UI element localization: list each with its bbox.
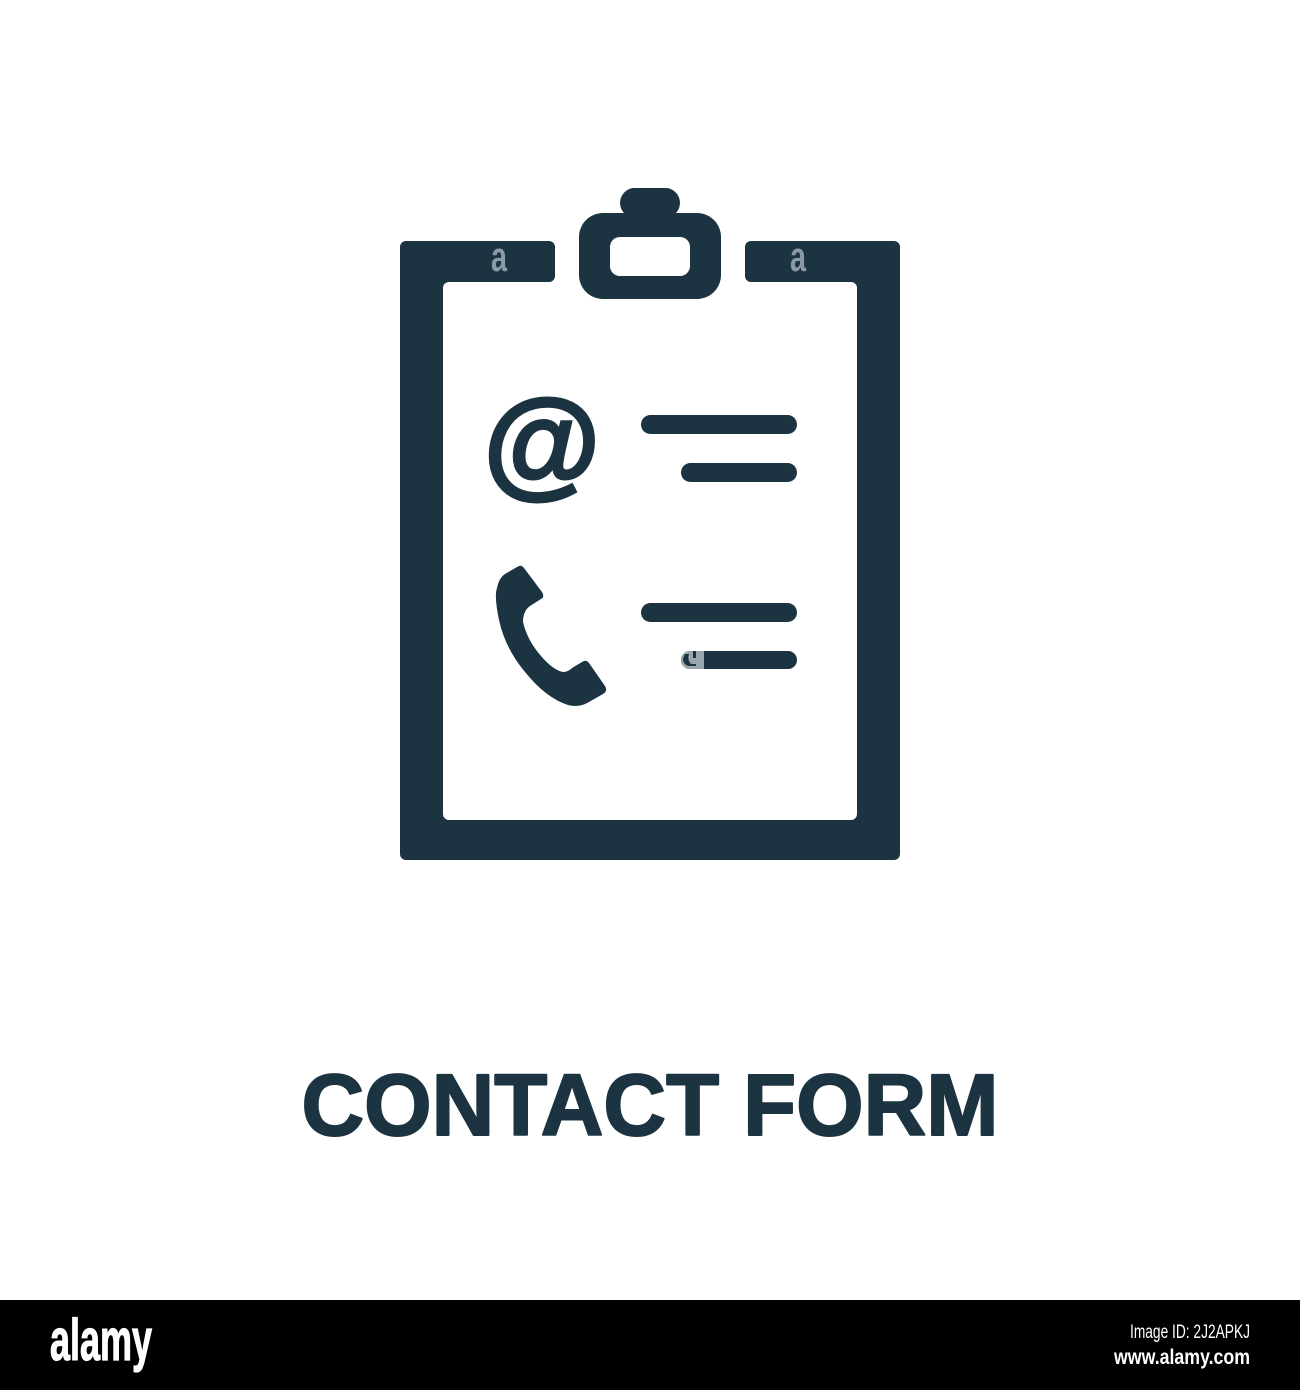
- image id: Image ID: 2J2APKJ: [1130, 1322, 1250, 1343]
- website: www.alamy.com: [1113, 1346, 1250, 1369]
- clipboard board: [400, 241, 900, 860]
- phone line short: [681, 651, 797, 669]
- clipboard clip: [579, 188, 721, 299]
- icon: at sign: @: [481, 377, 599, 511]
- title: CONTACT FORM: [302, 1057, 998, 1154]
- email line long: [641, 415, 797, 434]
- footer bar: [0, 1300, 1300, 1390]
- phone line long: [641, 603, 797, 622]
- watermark letter right: a: [790, 233, 806, 280]
- watermark letter left: a: [491, 233, 507, 280]
- icon: telephone handset: [496, 566, 606, 706]
- footer logo: alamy: [50, 1308, 152, 1373]
- watermark fragment on line: [681, 651, 704, 669]
- email line short: [681, 463, 797, 482]
- icon: clipboard contact form: [400, 188, 900, 860]
